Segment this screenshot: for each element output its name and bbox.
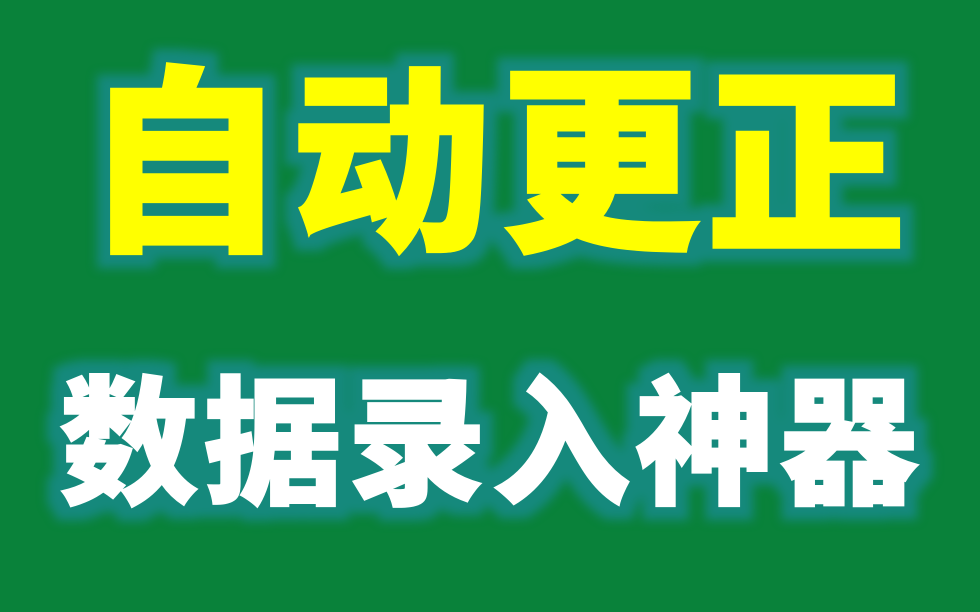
subtitle: white glowing headline: 数据录入神器 [60,368,924,523]
title: yellow glowing headline: 动 [291,55,491,278]
title: yellow glowing headline: 更 [500,55,700,278]
title: yellow glowing headline: 自 [85,55,285,278]
title: yellow glowing headline: 正 [706,55,906,278]
title: yellow glowing headline [85,44,918,278]
